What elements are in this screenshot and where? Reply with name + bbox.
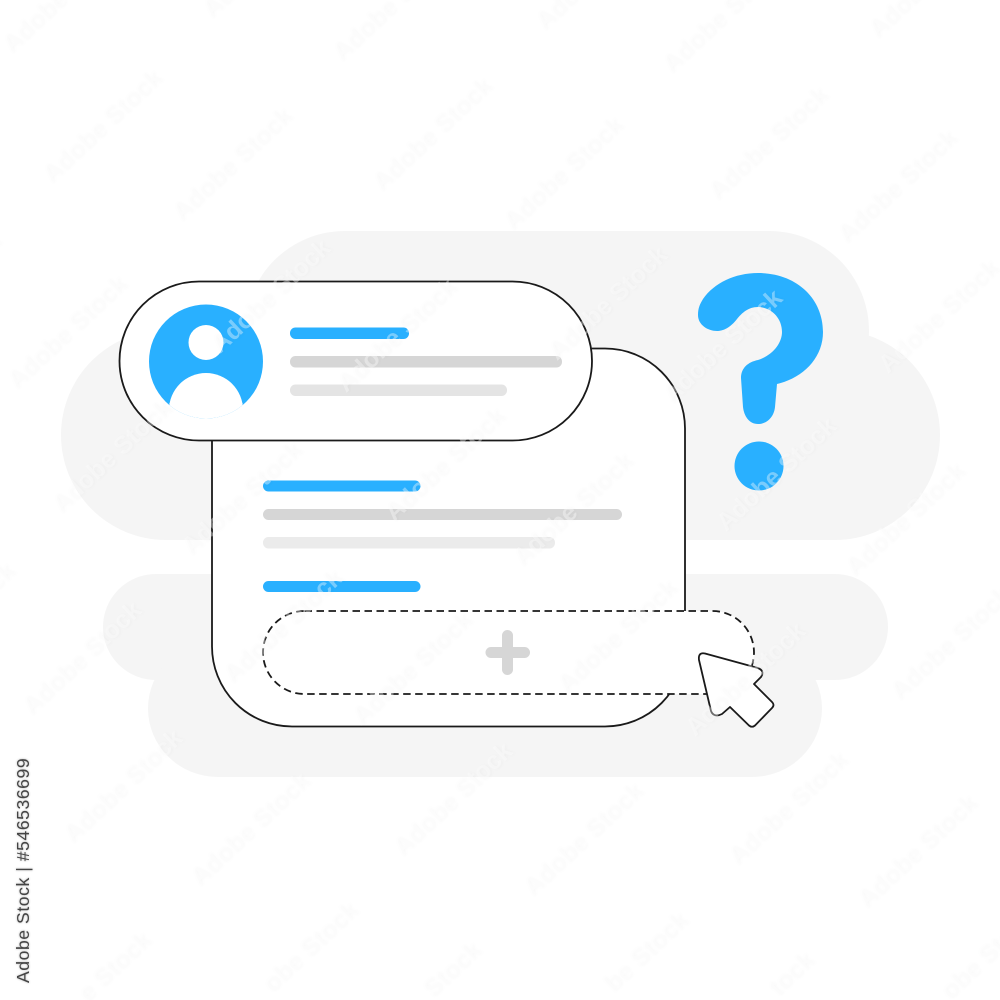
icon: avatar xyxy=(149,304,263,418)
stock watermark pattern: Adobe Stock xyxy=(166,102,297,226)
stock watermark pattern: Adobe Stock xyxy=(184,767,315,891)
stock watermark pattern: Adobe Stock xyxy=(16,596,147,720)
stock watermark pattern: tock xyxy=(762,946,819,1000)
stock watermark pattern: Adobe Stock xyxy=(1,270,132,394)
background cloud: upper xyxy=(61,231,940,540)
icon: plus xyxy=(486,630,530,675)
stock watermark pattern: Adobe Stock xyxy=(680,617,811,741)
stock watermark pattern: Adobe Stock xyxy=(57,724,188,848)
stock watermark pattern: Adobe Stock xyxy=(379,402,510,526)
stock watermark pattern: Adobe Stock xyxy=(702,81,833,205)
stock watermark pattern: Adobe Stock xyxy=(542,241,673,365)
stock watermark pattern: Adobe Stock xyxy=(205,234,336,358)
document heading line 1 xyxy=(263,480,420,492)
stock watermark pattern: obe Stock xyxy=(257,896,363,998)
stock watermark pattern: Adobe Stock xyxy=(831,124,962,248)
stock watermark pattern: Adobe Stock xyxy=(346,606,477,730)
panel: profile pill xyxy=(120,282,592,447)
document text line 1 xyxy=(263,509,622,520)
stock watermark pattern: Adobe Stock xyxy=(176,436,307,560)
profile text line 1 xyxy=(290,356,562,368)
stock watermark pattern: Adobe Stock xyxy=(387,737,518,861)
icon: question mark xyxy=(698,273,823,490)
stock watermark pattern: Adobe Stock xyxy=(36,64,167,188)
stock watermark pattern: be Stock xyxy=(598,906,693,997)
stock watermark pattern: Adobe Stock xyxy=(507,447,638,571)
illustration xyxy=(15,231,940,984)
stock watermark pattern: Adobe Stock xyxy=(497,111,628,235)
stock watermark pattern: Adobe Stock xyxy=(839,457,970,581)
document text line 2 xyxy=(263,537,555,548)
stock watermark pattern: Adobe Stock xyxy=(711,412,842,536)
stock watermark pattern: Adobe Stock xyxy=(517,777,648,901)
document heading line 2 xyxy=(263,581,420,592)
stock watermark pattern: Adobe Stock xyxy=(722,746,853,870)
dashed add field xyxy=(263,611,754,694)
profile text line 2 xyxy=(290,384,507,396)
stock watermark pattern: Adobe Stock xyxy=(46,394,177,518)
stock watermark pattern: Adobe Stock xyxy=(551,574,682,698)
stock watermark pattern: Adobe Stock xyxy=(217,564,348,688)
stock watermark pattern: Adobe Stock xyxy=(657,284,788,408)
background cloud: lower xyxy=(103,574,888,777)
stock watermark pattern: Adobe Stock xyxy=(366,72,497,196)
stock id vertical text: Adobe Stock | #546536699 xyxy=(13,758,33,983)
icon: mouse cursor arrow xyxy=(699,653,774,727)
profile name line xyxy=(290,328,409,339)
stock watermark pattern: Adobe Stock xyxy=(851,789,982,913)
stock watermark pattern: Adobe Stock xyxy=(331,273,462,397)
panel: document card xyxy=(212,348,685,726)
